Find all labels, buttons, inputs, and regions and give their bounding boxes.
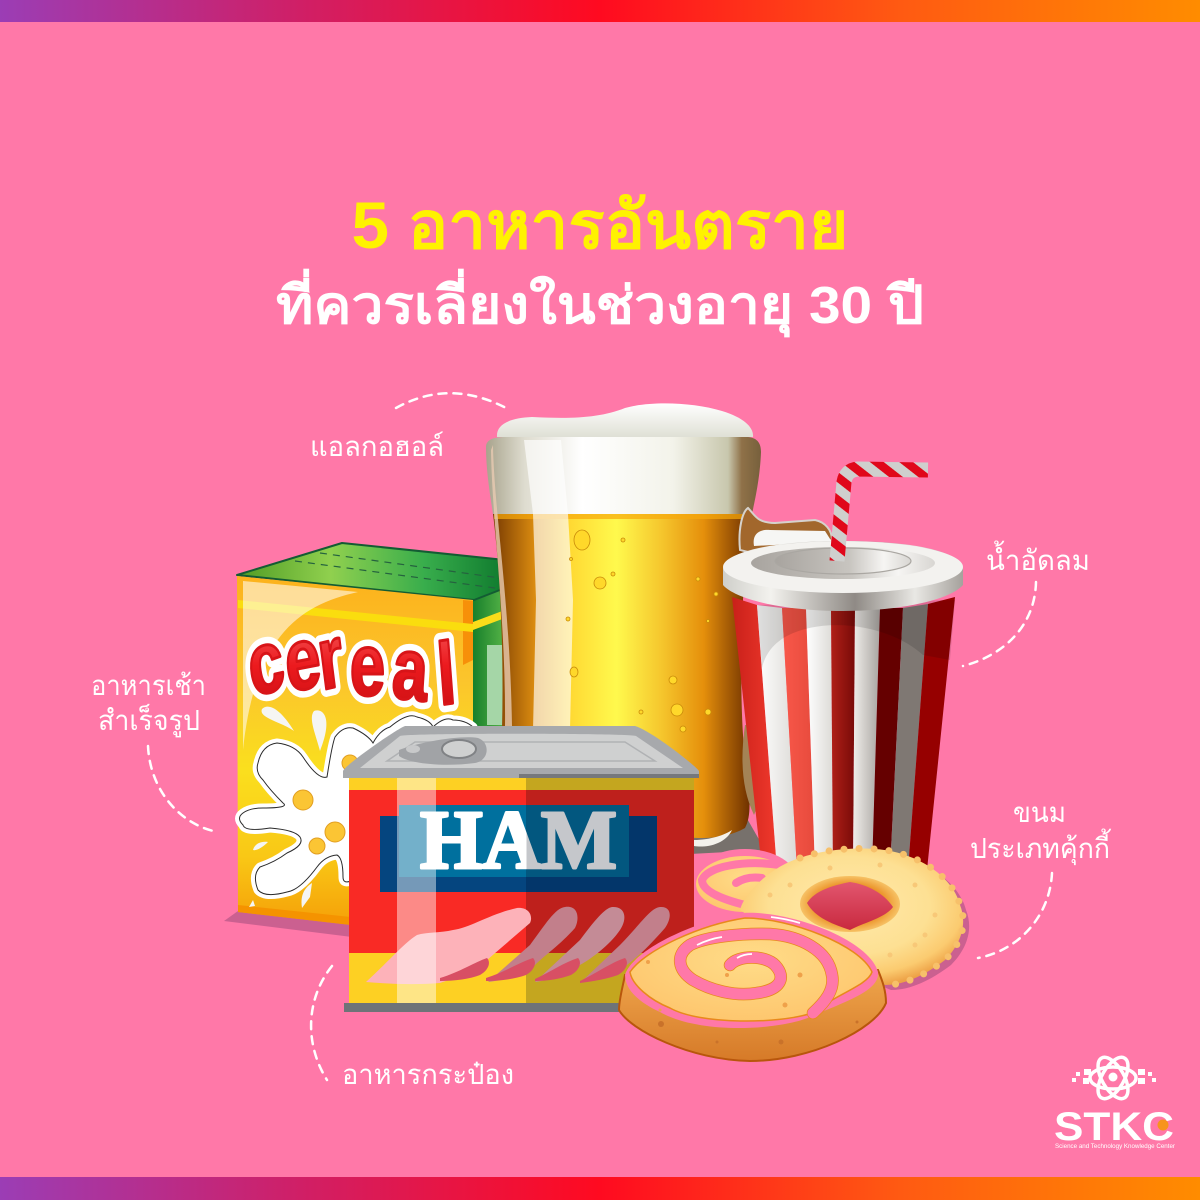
lid well [751, 547, 935, 579]
spiral icing rim [680, 934, 833, 1013]
cereal flakes [293, 755, 358, 854]
lid centre [775, 548, 911, 574]
cup top shadow [757, 600, 955, 668]
orange dot [1158, 1120, 1168, 1130]
cookie ring [740, 849, 963, 985]
milk drops [249, 707, 326, 908]
bottom gradient bar [0, 1177, 1200, 1200]
ham slices [366, 907, 670, 984]
title [276, 188, 924, 338]
lid top [723, 541, 963, 593]
pull tab [399, 737, 487, 765]
label: canned food [311, 966, 514, 1090]
jam [807, 882, 893, 930]
cookie hole [800, 876, 900, 932]
logo: STKC [1054, 1053, 1175, 1150]
spiral icing top [680, 934, 833, 1013]
cookies line 2: ประเภทคุ้กกี้ [970, 828, 1111, 866]
red label right [526, 790, 694, 953]
cup body stripes [732, 597, 955, 870]
banner left [399, 805, 526, 877]
logo halo: cereal [241, 607, 459, 724]
can body right [526, 778, 694, 1003]
soft drink text: น้ำอัดลม [986, 540, 1090, 576]
glass bottom crescent [694, 830, 732, 847]
alcohol text: แอลกอฮอล์ [310, 431, 444, 462]
cookies line 1: ขนม [1013, 797, 1066, 828]
side yellow band [473, 610, 505, 630]
glass base [690, 815, 765, 854]
banner right [526, 805, 629, 877]
liquid top line [494, 514, 748, 519]
left edge highlight [491, 445, 512, 726]
canned food text: อาหารกระป๋อง [342, 1059, 514, 1090]
gloss [243, 581, 358, 750]
flap dashed lines [295, 553, 500, 588]
back cookie spiral [702, 863, 780, 905]
icon: soda cup [723, 469, 963, 870]
milk splash outline [240, 716, 473, 900]
title line 2: ที่ควรเลี่ยงในช่วงอายุ 30 ปี [276, 269, 924, 338]
dashed connector [396, 393, 508, 409]
crumbs [768, 862, 938, 958]
ribbon back [380, 816, 526, 892]
label: soft drink [963, 540, 1090, 666]
title line 1: 5 อาหารอันตราย [352, 188, 848, 262]
breakfast line 1: อาหารเช้า [91, 670, 206, 701]
box top [237, 543, 505, 600]
dashed connector [963, 582, 1036, 666]
back cookie icing [692, 849, 798, 915]
ribbon back dark [526, 816, 657, 892]
icon: spiral cookie front [619, 913, 886, 1061]
handle inner white [754, 530, 832, 546]
milk splash [240, 716, 473, 900]
glass highlight [524, 440, 573, 730]
icon: jam cookie [740, 849, 969, 990]
logo letters: cereal [241, 607, 459, 724]
label: breakfast [91, 670, 218, 832]
lid rim dark [519, 774, 699, 778]
front bottom edge [238, 905, 360, 926]
straw [837, 469, 928, 561]
dashed connector [148, 746, 218, 832]
orange right edge [463, 600, 473, 665]
scalloped edge [800, 849, 963, 985]
icon: spiral cookie back [692, 849, 798, 915]
can base [344, 1003, 624, 1012]
bubbles [566, 530, 718, 732]
lid panel [360, 734, 683, 768]
crumbs [646, 960, 858, 1044]
icon: ham can [343, 726, 699, 1012]
cookie face [630, 918, 872, 1021]
pull tab hole [442, 740, 476, 758]
cookie shadow [746, 854, 969, 990]
icon: beer glass [486, 403, 765, 854]
lid recess line [387, 742, 655, 761]
beer glass handle top [739, 508, 832, 555]
cookie side [619, 970, 886, 1061]
beer glass handle lower [742, 725, 760, 815]
can lid [343, 726, 699, 778]
lid [723, 541, 963, 611]
glass and head [486, 437, 761, 514]
red label left [349, 790, 526, 953]
STKC wordmark: STKC [1054, 1105, 1174, 1149]
top gradient bar [0, 0, 1200, 22]
box side [473, 588, 505, 728]
breakfast line 2: สำเร็จรูป [98, 703, 200, 738]
vertical gloss stripe [397, 778, 436, 1003]
dashed connector [978, 873, 1052, 958]
foam [497, 403, 753, 437]
back cookie face [696, 856, 794, 912]
label: cookies [970, 797, 1111, 958]
can body left [349, 778, 526, 1003]
icing shine [697, 917, 800, 958]
beer liquid [493, 514, 750, 838]
pixel squares [1072, 1069, 1156, 1084]
yellow band [238, 600, 473, 632]
tagline: Science and Technology Knowledge Center [1055, 1144, 1175, 1150]
HAM label: HAM [420, 794, 617, 887]
dashed connector [311, 966, 332, 1080]
side window [487, 645, 503, 725]
pink icing [625, 913, 878, 1028]
cereal logo [241, 607, 459, 724]
atom icon [1090, 1053, 1136, 1103]
box shadow [224, 911, 360, 938]
box front [237, 576, 473, 926]
label: alcohol [310, 393, 508, 462]
icon: cereal box [224, 543, 505, 938]
pull tab rivet [406, 745, 420, 753]
